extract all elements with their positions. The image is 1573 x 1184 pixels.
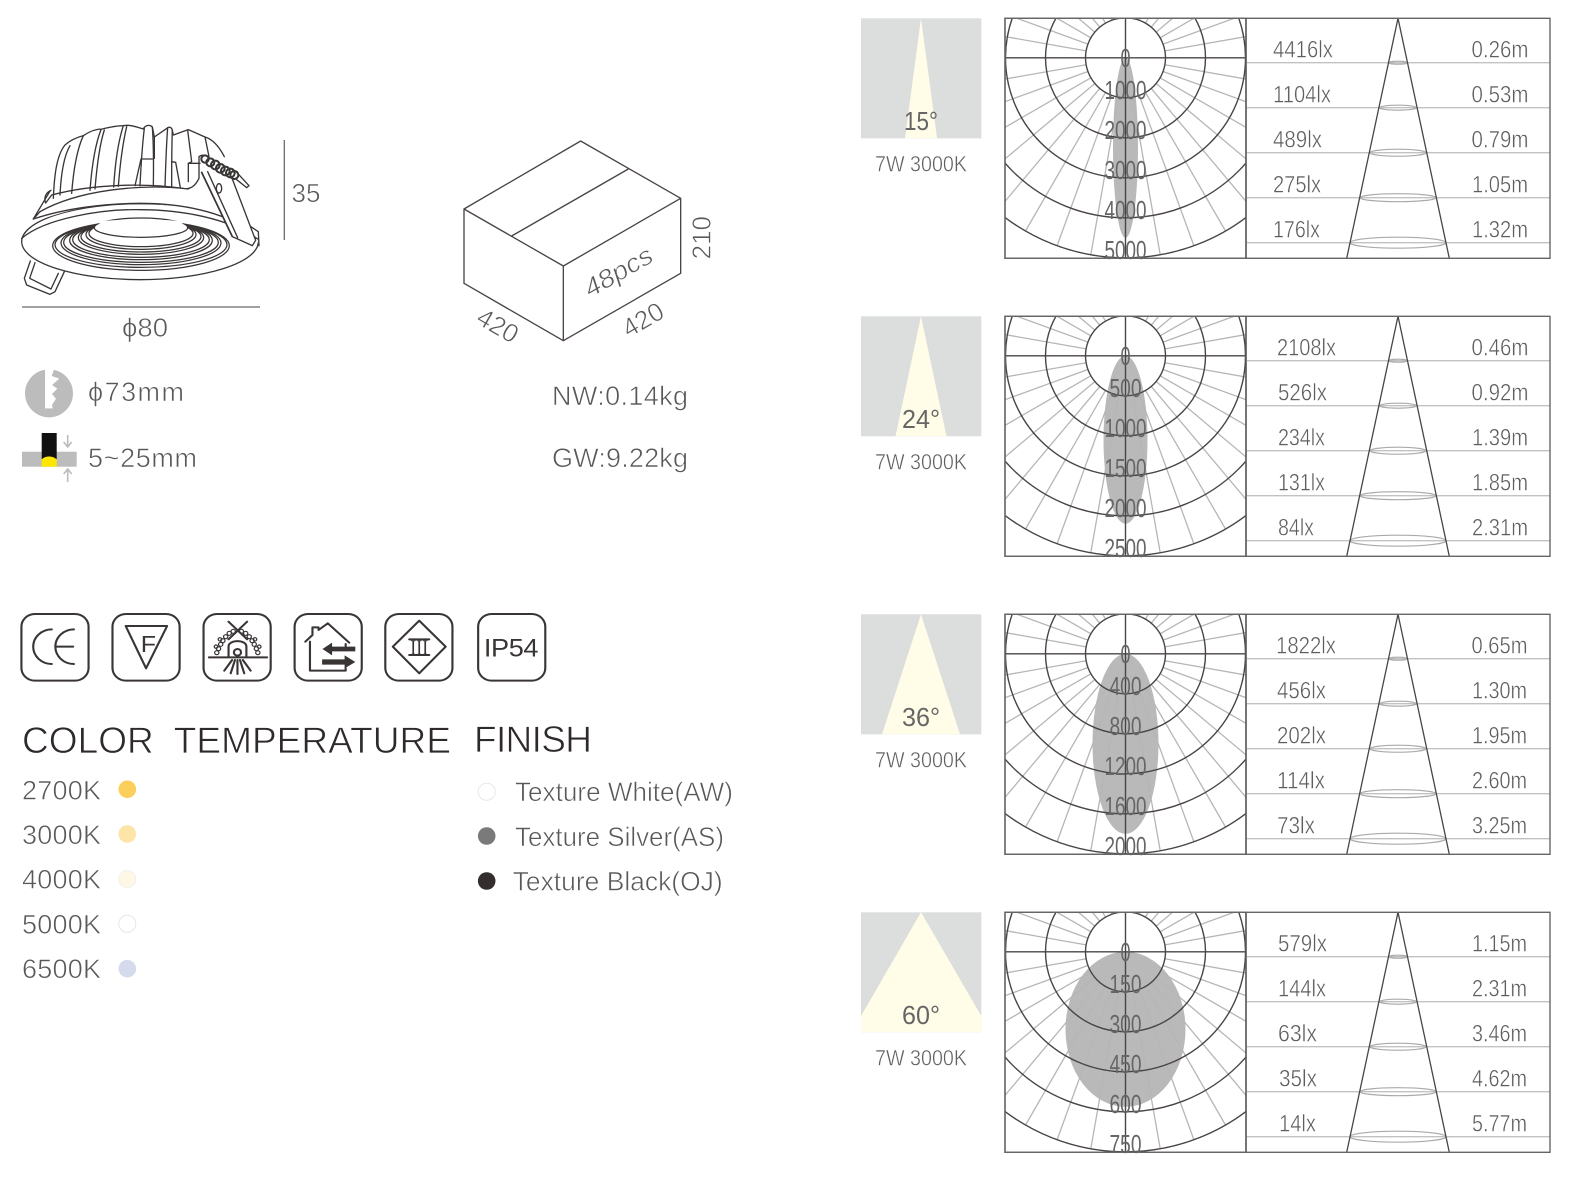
icon: F mark: F [141,632,156,658]
polar chart 60 degrees [926,752,1326,1159]
polar chart 60 degrees: 150 [1110,969,1142,999]
polar chart 60 degrees: 300 [1110,1009,1142,1039]
icon: F mark [112,614,180,681]
icon: cut-out hole [25,367,73,417]
illuminance table 24 degrees: 1.85m [1472,470,1528,497]
net weight: NW:0.14kg [552,381,688,411]
colour temperature list: 6500K [22,954,101,984]
flange [22,204,258,280]
icon: IP54: IP54 [484,634,539,662]
polar chart 15 degrees: 0 [1120,43,1130,73]
illuminance table 60 degrees: 1.15m [1472,931,1527,958]
illuminance table 60 degrees: 3.46m [1472,1021,1527,1048]
polar chart 24 degrees: 2000 [1104,493,1146,523]
gross weight: GW:9.22kg [552,443,688,473]
illuminance table 24 degrees: 131lx [1278,470,1325,497]
illuminance table 24 degrees: 84lx [1278,515,1314,542]
finish list: Texture Black(OJ) [513,867,723,897]
illuminance table 15 degrees: 0.79m [1472,127,1528,154]
illuminance table 36 degrees: 1.30m [1472,678,1527,705]
polar chart 15 degrees: 2000 [1104,115,1146,145]
beam swatch 15 degrees: 15° [904,106,938,136]
ceiling thickness value: 5~25mm [88,443,197,473]
polar chart 60 degrees: 600 [1110,1089,1142,1119]
polar chart 15 degrees: 3000 [1104,155,1146,185]
illuminance table 60 degrees: 2.31m [1472,976,1527,1003]
panel: 36 degree beam [861,454,1550,861]
beam caption: 7W 3000K [875,450,967,475]
icon: ceiling thickness [22,433,77,482]
panel: 15 degree beam [861,0,1550,265]
polar chart 60 degrees: 0 [1120,937,1130,967]
illuminance table 60 degrees: 4.62m [1472,1066,1527,1093]
dimension: product height [284,140,320,240]
illuminance table 24 degrees: 234lx [1278,425,1325,452]
bottom-left clip [24,261,64,294]
colour temperature list: 2700K [22,775,101,805]
polar chart 24 degrees: 1500 [1104,453,1146,483]
beam swatch 36 degrees: 36° [902,702,940,732]
colour temperature list [22,775,136,984]
illuminance table 15 degrees: 1104lx [1273,82,1331,109]
polar chart 36 degrees [926,454,1326,861]
polar chart 24 degrees: 2500 [1104,533,1146,563]
colour temperature list: 4000K [22,865,101,895]
illuminance table 36 degrees [1005,614,1550,854]
illuminance table 15 degrees: 176lx [1273,217,1320,244]
polar chart 24 degrees: 500 [1110,373,1142,403]
illuminance table 15 degrees [1005,18,1550,258]
illuminance table 15 degrees: 275lx [1273,172,1321,199]
icon: indoor/outdoor house [295,614,362,681]
heading: colour temperature: COLOR TEMPERATURE [22,720,451,761]
illuminance table 60 degrees: 63lx [1278,1021,1317,1048]
polar chart 15 degrees: 4000 [1104,195,1146,225]
beam swatch 24 degrees [861,316,981,436]
beam caption: 7W 3000K [875,152,967,177]
polar chart 15 degrees: 5000 [1104,235,1146,265]
illuminance table 36 degrees: 1.95m [1472,723,1527,750]
stepped baffle [53,218,229,270]
certification icons [21,614,545,681]
carton quantity: 48pcs [578,240,658,303]
illuminance table 24 degrees: 2.31m [1472,515,1528,542]
illuminance table 15 degrees: 489lx [1273,127,1322,154]
beam swatch 60 degrees [861,912,981,1032]
polar chart 36 degrees: 1200 [1104,751,1146,781]
finish list [478,777,733,897]
illuminance table 36 degrees: 0.65m [1472,633,1528,660]
illuminance table 24 degrees: 2108lx [1277,335,1336,362]
heading: finish: FINISH [474,719,592,760]
cut-out size: ϕ73mm [88,377,184,407]
spring clip [201,155,256,246]
illuminance table 36 degrees: 2.60m [1472,768,1527,795]
icon: IP54 [478,614,545,681]
polar chart 24 degrees [926,156,1326,563]
icon: protection class III: III [410,635,428,659]
polar chart 36 degrees: 1600 [1104,791,1146,821]
panel: 60 degree beam [861,752,1550,1159]
carton box drawing [464,141,717,349]
polar chart 15 degrees [926,0,1326,265]
polar chart 60 degrees: 450 [1110,1049,1142,1079]
product drawing: recessed downlight [22,125,259,294]
illuminance table 36 degrees: 73lx [1277,813,1315,840]
illuminance table 36 degrees: 3.25m [1472,813,1527,840]
illuminance table 36 degrees: 114lx [1277,768,1325,795]
polar chart 36 degrees: 2000 [1104,831,1146,861]
illuminance table 60 degrees: 5.77m [1472,1111,1527,1138]
illuminance table 15 degrees: 1.32m [1472,217,1528,244]
colour temperature list: 3000K [22,820,101,850]
polar chart 60 degrees: 750 [1110,1129,1142,1159]
icon: do not cover with insulation [204,614,271,681]
finish list: Texture White(AW) [515,777,733,807]
polar chart 36 degrees: 0 [1120,639,1130,669]
colour temperature list: 5000K [22,909,101,939]
beam swatch 60 degrees: 60° [902,1000,940,1030]
polar chart 15 degrees: 1000 [1104,75,1146,105]
illuminance table 60 degrees: 14lx [1279,1111,1316,1138]
beam swatch 24 degrees: 24° [902,404,940,434]
carton length: 420 [472,302,524,349]
panel: 24 degree beam [861,156,1550,563]
polar chart 36 degrees: 400 [1110,671,1142,701]
beam swatch 36 degrees [861,614,981,734]
illuminance table 60 degrees [1005,912,1550,1152]
polar chart 24 degrees: 0 [1120,341,1130,371]
illuminance table 15 degrees: 1.05m [1472,172,1528,199]
heat sink fins [33,125,224,219]
illuminance table 24 degrees: 1.39m [1472,425,1528,452]
beam caption: 7W 3000K [875,1046,967,1071]
illuminance table 36 degrees: 1822lx [1276,633,1336,660]
illuminance table 15 degrees: 0.53m [1472,82,1528,109]
carton height: 210 [687,216,717,259]
beam caption: 7W 3000K [875,748,967,773]
illuminance table 24 degrees: 0.46m [1472,335,1528,362]
dimension: product diameter: ϕ80 [122,313,168,343]
illuminance table 60 degrees: 35lx [1279,1066,1317,1093]
icon: CE [21,614,89,681]
illuminance table 15 degrees: 4416lx [1273,37,1333,64]
dimension: product height: 35 [292,178,320,208]
illuminance table 15 degrees: 0.26m [1472,37,1528,64]
carton width: 420 [617,296,669,343]
icon: protection class III [385,614,452,681]
beam swatch 15 degrees [861,18,981,138]
illuminance table 36 degrees: 202lx [1277,723,1326,750]
illuminance table 24 degrees: 526lx [1278,380,1327,407]
illuminance table 60 degrees: 579lx [1278,931,1327,958]
illuminance table 24 degrees [1005,316,1550,556]
polar chart 24 degrees: 1000 [1104,413,1146,443]
polar chart 36 degrees: 800 [1110,711,1142,741]
illuminance table 60 degrees: 144lx [1278,976,1326,1003]
illuminance table 24 degrees: 0.92m [1472,380,1528,407]
illuminance table 36 degrees: 456lx [1277,678,1326,705]
finish list: Texture Silver(AS) [515,822,724,852]
